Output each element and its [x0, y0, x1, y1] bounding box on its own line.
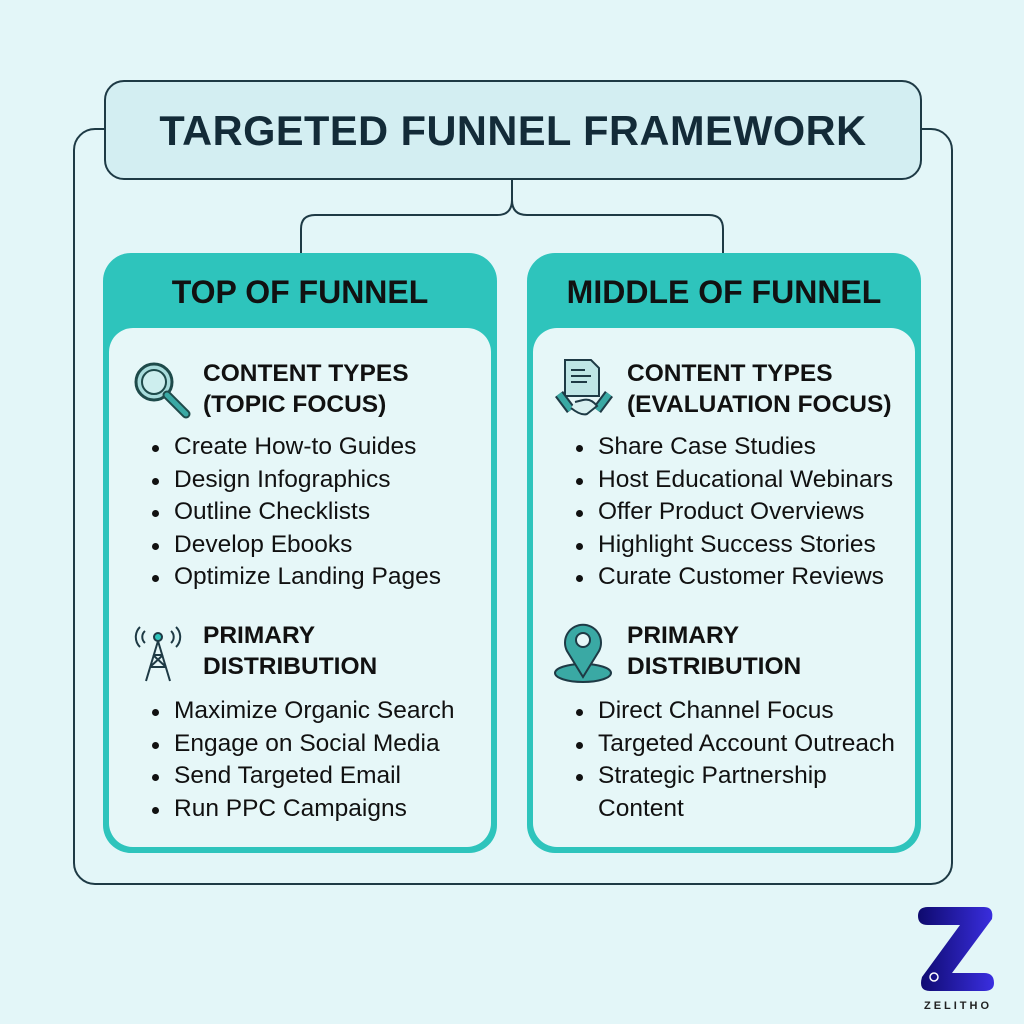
list: content: Design Infographics: [174, 466, 391, 492]
list: content: Highlight Success Stories: [598, 530, 876, 558]
heading: primary distribution: DISTRIBUTION: [627, 653, 801, 680]
heading: content types: CONTENT TYPES: [627, 360, 833, 387]
connector lines: [300, 180, 724, 253]
title: [104, 80, 922, 180]
list: content: Offer Product Overviews: [598, 498, 864, 525]
list: distribution: Engage on Social Media: [174, 730, 440, 756]
logo: ZELITHO: [924, 1000, 992, 1012]
heading: content types: [203, 360, 409, 418]
heading: primary distribution: [203, 622, 377, 680]
icon: antenna tower: [134, 626, 182, 682]
list: content: [152, 433, 441, 590]
heading: content types: (TOPIC FOCUS): [203, 391, 386, 418]
list: content: Host Educational Webinars: [598, 466, 893, 492]
icon: magnifier: [134, 362, 190, 418]
heading: content types: [627, 360, 892, 418]
panel: top of funnel: [103, 253, 497, 853]
list: distribution: Direct Channel Focus: [598, 697, 834, 724]
list: content: Share Case Studies: [598, 433, 816, 460]
list: distribution: Send Targeted Email: [174, 762, 401, 789]
outer frame: [73, 128, 953, 885]
list: distribution: [576, 697, 895, 822]
list: content: Develop Ebooks: [174, 530, 352, 558]
list: content: Optimize Landing Pages: [174, 563, 441, 590]
list: distribution: Content: [598, 794, 684, 822]
list: distribution: Maximize Organic Search: [174, 697, 454, 724]
title: TARGETED FUNNEL FRAMEWORK: [159, 107, 867, 154]
list: distribution: Targeted Account Outreach: [598, 730, 895, 756]
heading: middle of funnel: MIDDLE OF FUNNEL: [567, 274, 881, 310]
list: content: Outline Checklists: [174, 498, 370, 525]
icon: location pin: [554, 624, 612, 683]
list: content: Curate Customer Reviews: [598, 563, 884, 590]
list: distribution: [152, 697, 454, 822]
list: distribution: Strategic Partnership: [598, 762, 827, 789]
list: content: [576, 433, 893, 590]
heading: content types: (EVALUATION FOCUS): [627, 391, 892, 418]
heading: top of funnel: TOP OF FUNNEL: [172, 274, 428, 310]
icon: document handshake: [555, 359, 613, 416]
heading: primary distribution: DISTRIBUTION: [203, 653, 377, 680]
panel: middle of funnel: [527, 253, 921, 853]
heading: primary distribution: [627, 622, 801, 680]
list: distribution: Run PPC Campaigns: [174, 794, 407, 822]
logo: [918, 907, 994, 1012]
list: content: Create How-to Guides: [174, 433, 416, 460]
heading: content types: CONTENT TYPES: [203, 360, 409, 387]
heading: primary distribution: PRIMARY: [627, 622, 739, 649]
heading: primary distribution: PRIMARY: [203, 622, 315, 649]
